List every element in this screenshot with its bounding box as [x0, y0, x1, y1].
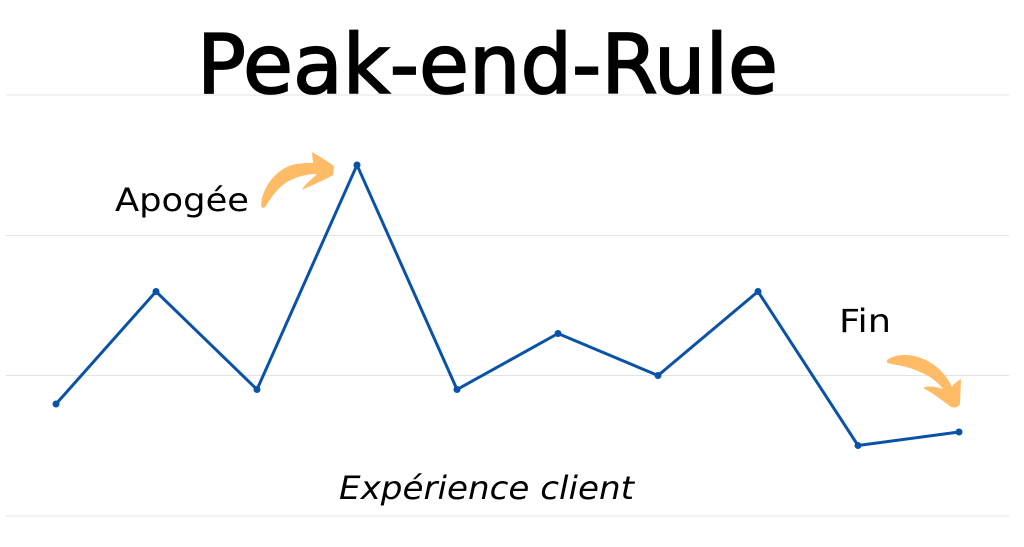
caption: Expérience client: Expérience client — [339, 469, 636, 507]
icon: arrow to end — [887, 355, 961, 408]
icon: arrow to peak — [261, 152, 334, 208]
title: Peak-end-Rule — [197, 18, 778, 113]
line chart: customer experience — [52, 162, 962, 449]
label: Fin: Fin — [839, 302, 891, 340]
label: Apogée: Apogée — [115, 181, 249, 219]
